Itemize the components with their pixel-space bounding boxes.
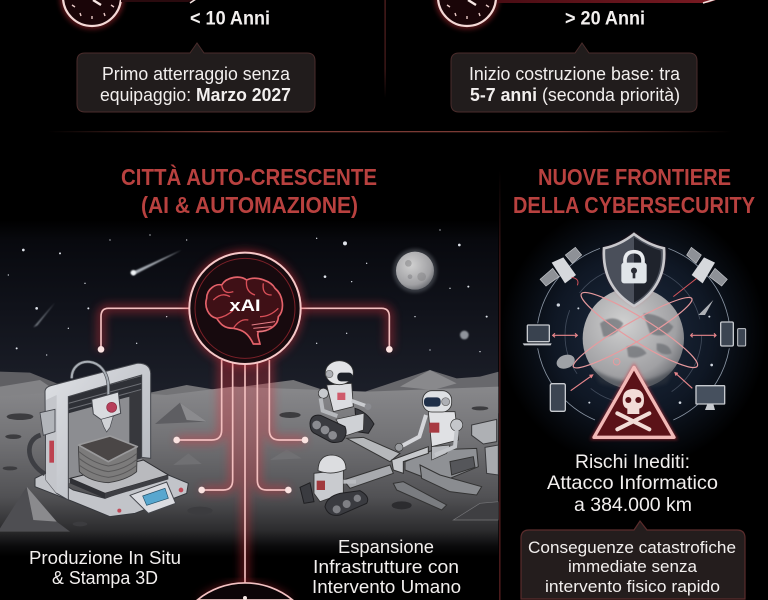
robot one xyxy=(310,361,374,443)
callout: first landing: Primo atterraggio senza xyxy=(102,64,291,84)
icon: tablet right xyxy=(721,322,746,346)
timeline right: over 20 years xyxy=(438,0,716,112)
label: infrastructure expansion xyxy=(312,536,461,597)
printer interior xyxy=(68,375,142,483)
icon: satellite left xyxy=(540,247,582,286)
sky xyxy=(0,220,498,393)
heading: cybersecurity: NUOVE FRONTIERE xyxy=(538,164,731,190)
moon xyxy=(393,249,469,339)
icon: shield xyxy=(604,233,664,307)
heading: cybersecurity xyxy=(513,164,755,218)
control panel xyxy=(130,482,176,513)
threat arrows xyxy=(553,333,716,391)
label: unprecedented risks: Attacco Informatico xyxy=(547,472,718,494)
icon: satellite right xyxy=(673,247,727,297)
panel: cybersecurity network xyxy=(512,220,755,456)
orbit rings xyxy=(538,248,729,420)
moon xyxy=(583,288,684,389)
icon: brain xyxy=(206,277,282,344)
label: infrastructure expansion: Infrastrutture con xyxy=(313,556,459,577)
comets xyxy=(33,250,182,327)
vertical divider top xyxy=(384,0,386,98)
heading: self-growing city: (AI & AUTOMAZIONE) xyxy=(141,192,358,218)
arrow band left xyxy=(121,0,196,2)
bed xyxy=(70,460,168,493)
duration label left: < 10 Anni xyxy=(190,8,270,30)
icon: phone left xyxy=(550,384,565,411)
callout: consequences: immediate senza xyxy=(568,557,698,576)
beams xyxy=(343,437,482,510)
icon: clock right xyxy=(438,0,496,26)
callout: first landing xyxy=(77,43,315,112)
icon: laptop xyxy=(523,325,552,345)
sparkles xyxy=(557,303,713,404)
print head xyxy=(92,392,121,432)
label: unprecedented risks xyxy=(547,451,718,516)
side box and hose xyxy=(29,409,55,474)
hub: lower circle xyxy=(197,583,293,600)
arrow head left xyxy=(190,0,196,3)
crates xyxy=(472,419,498,475)
label: infrastructure expansion: Intervento Umano xyxy=(312,576,461,597)
printer cable xyxy=(72,362,108,396)
callout: consequences: Conseguenze catastrofiche xyxy=(528,538,736,557)
timeline left: under 10 years xyxy=(63,0,315,112)
printer frame xyxy=(45,363,151,500)
icon: monitor xyxy=(696,386,725,410)
callout: consequences: intervento fisico rapido xyxy=(545,577,720,596)
robot three xyxy=(300,455,368,515)
rock bottom right xyxy=(453,502,498,520)
label: in-situ production xyxy=(29,547,181,588)
label: in-situ production: & Stampa 3D xyxy=(52,567,158,588)
panel: lunar city scene xyxy=(0,220,499,600)
connector dots xyxy=(98,346,393,493)
3D printer xyxy=(29,362,188,517)
network glow xyxy=(512,220,755,456)
horizontal divider xyxy=(48,131,732,132)
label: unprecedented risks: a 384.000 km xyxy=(574,494,692,516)
icon: warning triangle xyxy=(594,367,674,437)
rock near wrench xyxy=(392,501,412,509)
stars xyxy=(8,229,488,356)
printer base xyxy=(35,473,188,517)
rocks xyxy=(0,403,488,532)
arrow band right xyxy=(497,0,716,3)
printed object xyxy=(78,436,137,483)
hills xyxy=(0,370,499,413)
ground xyxy=(0,387,499,557)
connector glow xyxy=(101,308,389,583)
icon: skull xyxy=(617,389,649,429)
status lights xyxy=(117,488,183,513)
callout: base construction xyxy=(451,43,697,112)
heading: self-growing city: CITTÀ AUTO-CRESCENTE xyxy=(121,163,377,190)
icon: clock left xyxy=(63,0,121,26)
label: infrastructure expansion: Espansione xyxy=(338,536,434,557)
arrow head right xyxy=(703,0,716,3)
vertical divider right xyxy=(499,170,501,600)
callout: consequences xyxy=(521,521,745,599)
callout: first landing: equipaggio: Marzo 2027 xyxy=(100,85,291,105)
heading: self-growing city xyxy=(121,163,377,218)
hub: xAI brain xyxy=(188,251,302,366)
callout: base construction: 5-7 anni (seconda priorità) xyxy=(470,85,680,105)
label: in-situ production: Produzione In Situ xyxy=(29,547,181,568)
label: unprecedented risks: Rischi Inediti: xyxy=(575,451,690,473)
icon: lock xyxy=(621,252,647,283)
orbit lines xyxy=(572,292,698,368)
robots and structure xyxy=(300,361,498,520)
callout: base construction: Inizio costruzione base: tra xyxy=(469,64,681,84)
robot two xyxy=(395,391,463,460)
connectors xyxy=(101,308,389,583)
duration label right: > 20 Anni xyxy=(565,8,645,30)
icon: probe xyxy=(555,300,713,371)
hub label: xAI xyxy=(230,296,260,315)
